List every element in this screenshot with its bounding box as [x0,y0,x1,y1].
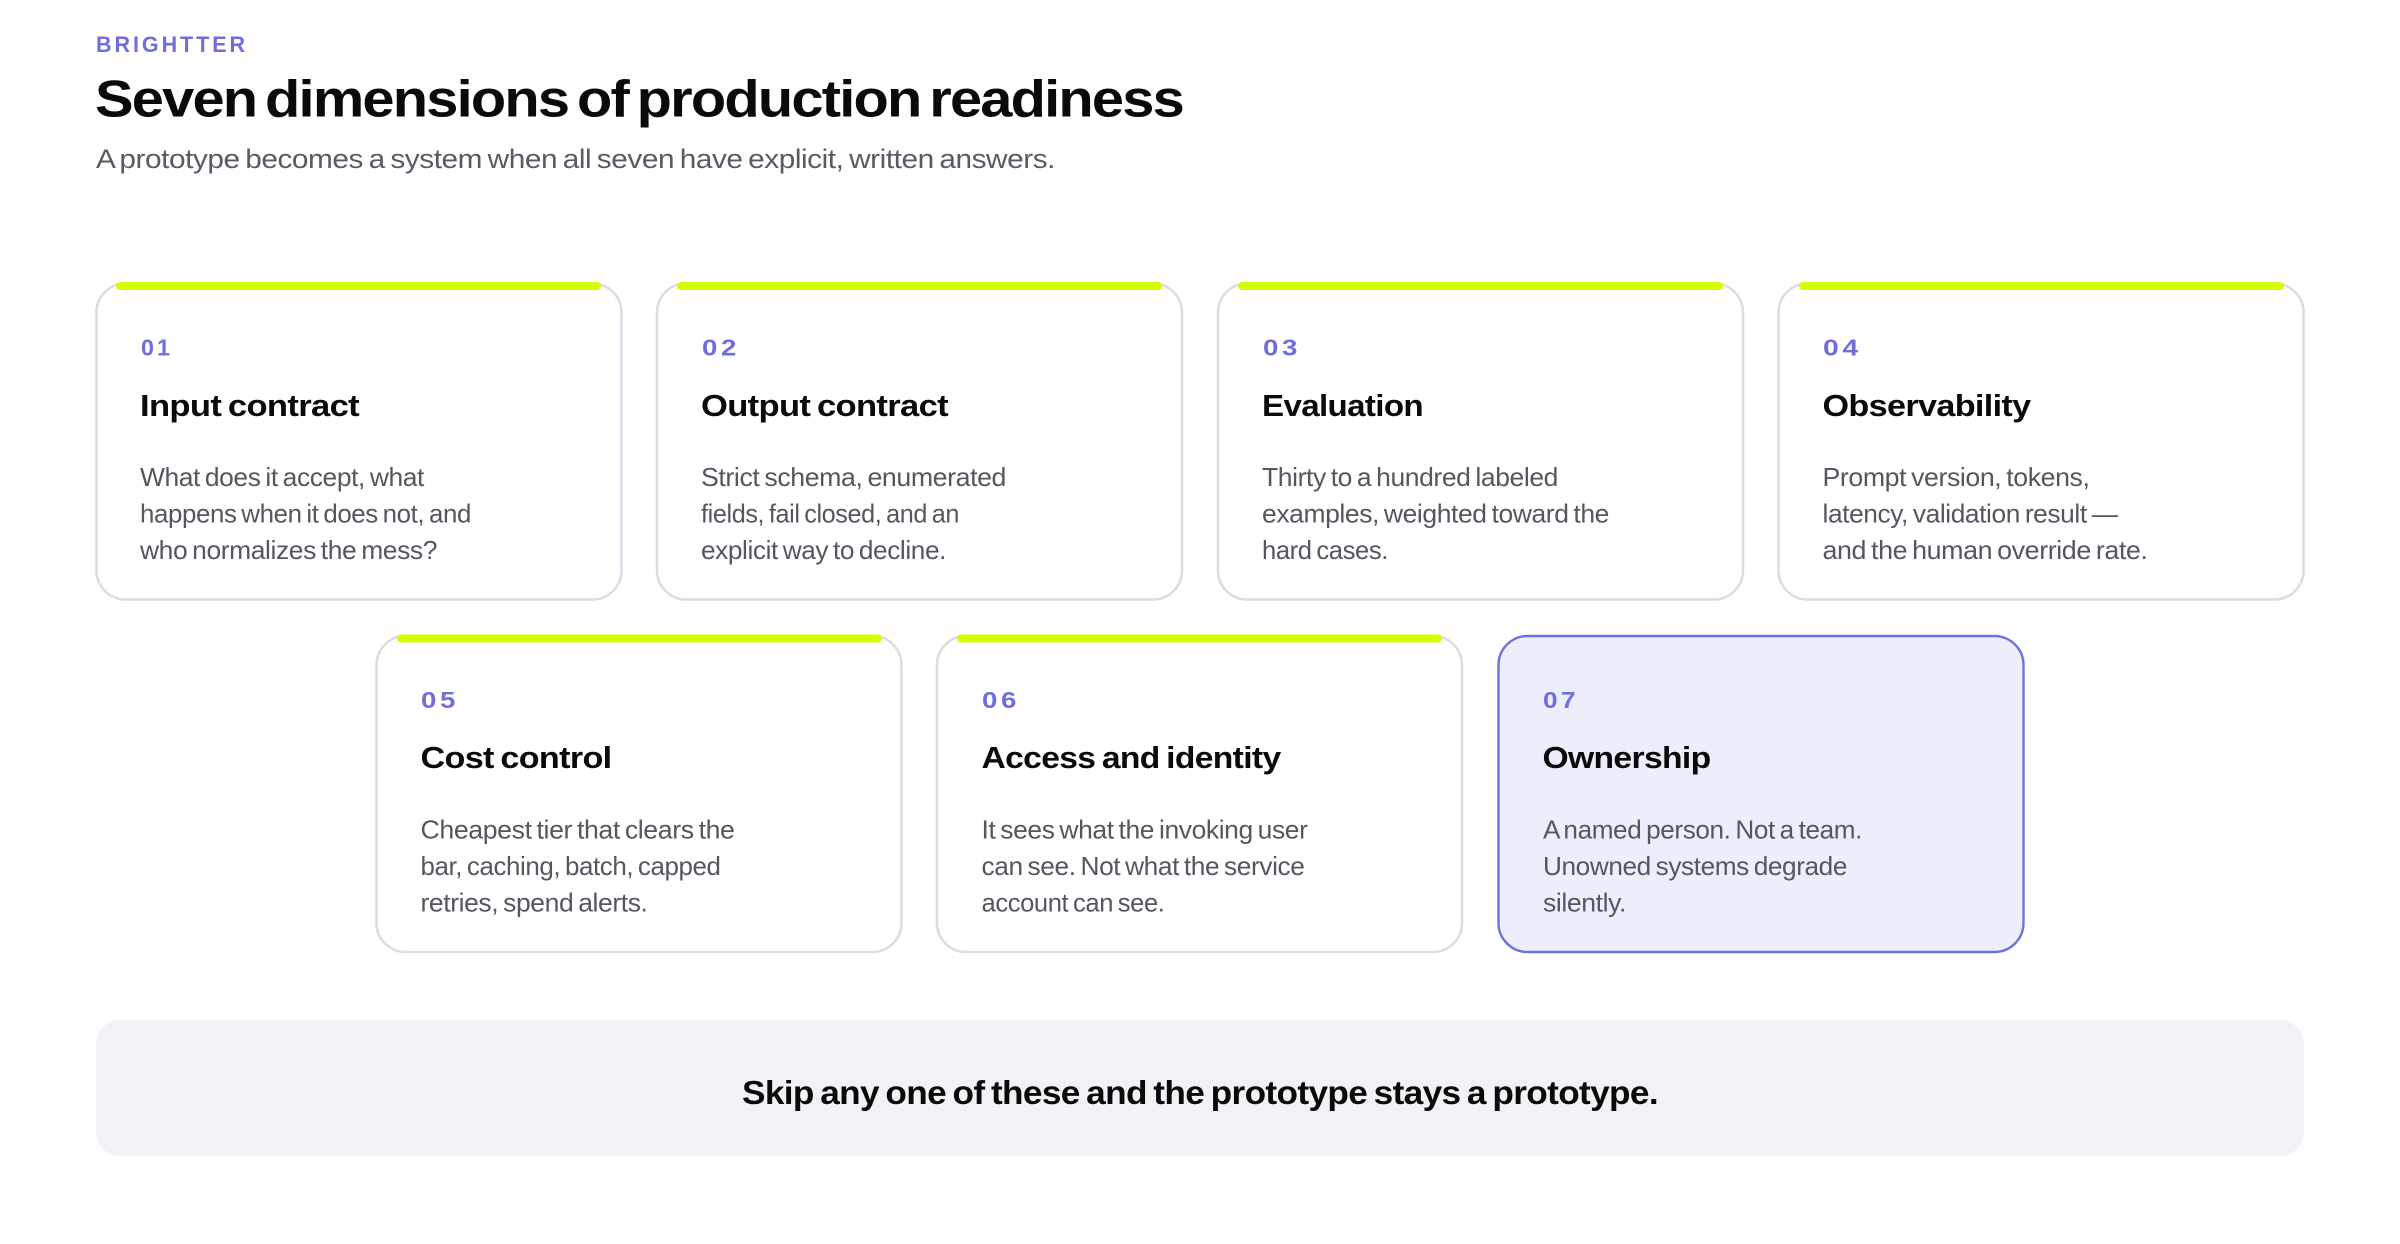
panel: card 04 observability [1778,282,2304,600]
body text 01: What does it accept, what [140,462,425,492]
accent bar 01 [116,282,601,290]
body text 07: silently. [1543,888,1626,918]
heading: Evaluation: Evaluation [1262,388,1423,423]
body text 06 [982,814,1308,918]
accent bar 06 [957,634,1442,642]
body text 01: who normalizes the mess? [139,535,437,565]
body text 04 [1822,462,2148,565]
heading: Access and identity: Access and identity [982,740,1282,775]
body text 05: bar, caching, batch, capped [420,851,720,881]
number 03: 03 [1263,334,1301,360]
panel: card 06 access and identity [937,634,1462,952]
body text 04: Prompt version, tokens, [1822,462,2090,492]
panel: card 02 output contract [657,282,1182,600]
body text 05: Cheapest tier that clears the [420,814,734,844]
body text 04: latency, validation result — [1822,498,2118,528]
body text 06: account can see. [982,888,1164,918]
body text 02: fields, fail closed, and an [701,498,959,528]
accent bar 03 [1238,282,1723,290]
heading: Input contract: Input contract [140,388,359,423]
number 02: 02 [702,334,740,360]
heading: Observability: Observability [1822,388,2032,423]
number 07: 07 [1543,687,1579,713]
heading: Cost control: Cost control [420,740,612,775]
accent bar 05 [397,634,882,642]
body text 07 [1543,814,1862,918]
panel: card 05 cost control [376,634,902,952]
body text 05: retries, spend alerts. [420,888,648,918]
number 04: 04 [1823,334,1862,360]
body text 04: and the human override rate. [1822,535,2148,565]
number 01: 01 [141,334,173,360]
number 06: 06 [982,687,1020,713]
eyebrow: brand: BRIGHTTER [96,32,248,57]
body text 03: Thirty to a hundred labeled [1262,462,1558,492]
panel: card 07 ownership highlighted [1498,636,2024,952]
number 05: 05 [421,687,459,713]
panel: card 03 evaluation [1218,282,1743,600]
body text 02 [701,462,1006,565]
body text 05 [420,814,734,918]
accent bar 04 [1799,282,2284,290]
body text 01 [139,462,471,565]
callout: footer banner [96,1020,2304,1156]
body text 01: happens when it does not, and [140,498,471,528]
body text 03: hard cases. [1262,535,1388,565]
body text 07: Unowned systems degrade [1543,851,1847,881]
accent bar 02 [677,282,1162,290]
panel: card 01 input contract [96,282,622,600]
body text 06: can see. Not what the service [982,851,1304,881]
subtitle: A prototype becomes a system when all seven have explicit, written answers. [96,144,1055,174]
body text 03: examples, weighted toward the [1262,498,1609,528]
callout text: Skip any one of these and the prototype stays a prototype. [742,1074,1658,1111]
body text 02: explicit way to decline. [701,535,946,565]
body text 07: A named person. Not a team. [1543,814,1862,844]
heading: Output contract: Output contract [701,388,948,423]
heading: Ownership: Ownership [1542,740,1710,775]
body text 02: Strict schema, enumerated [701,462,1006,492]
title: Seven dimensions of production readiness [95,70,1183,128]
body text 06: It sees what the invoking user [982,814,1308,844]
body text 03 [1262,462,1609,565]
